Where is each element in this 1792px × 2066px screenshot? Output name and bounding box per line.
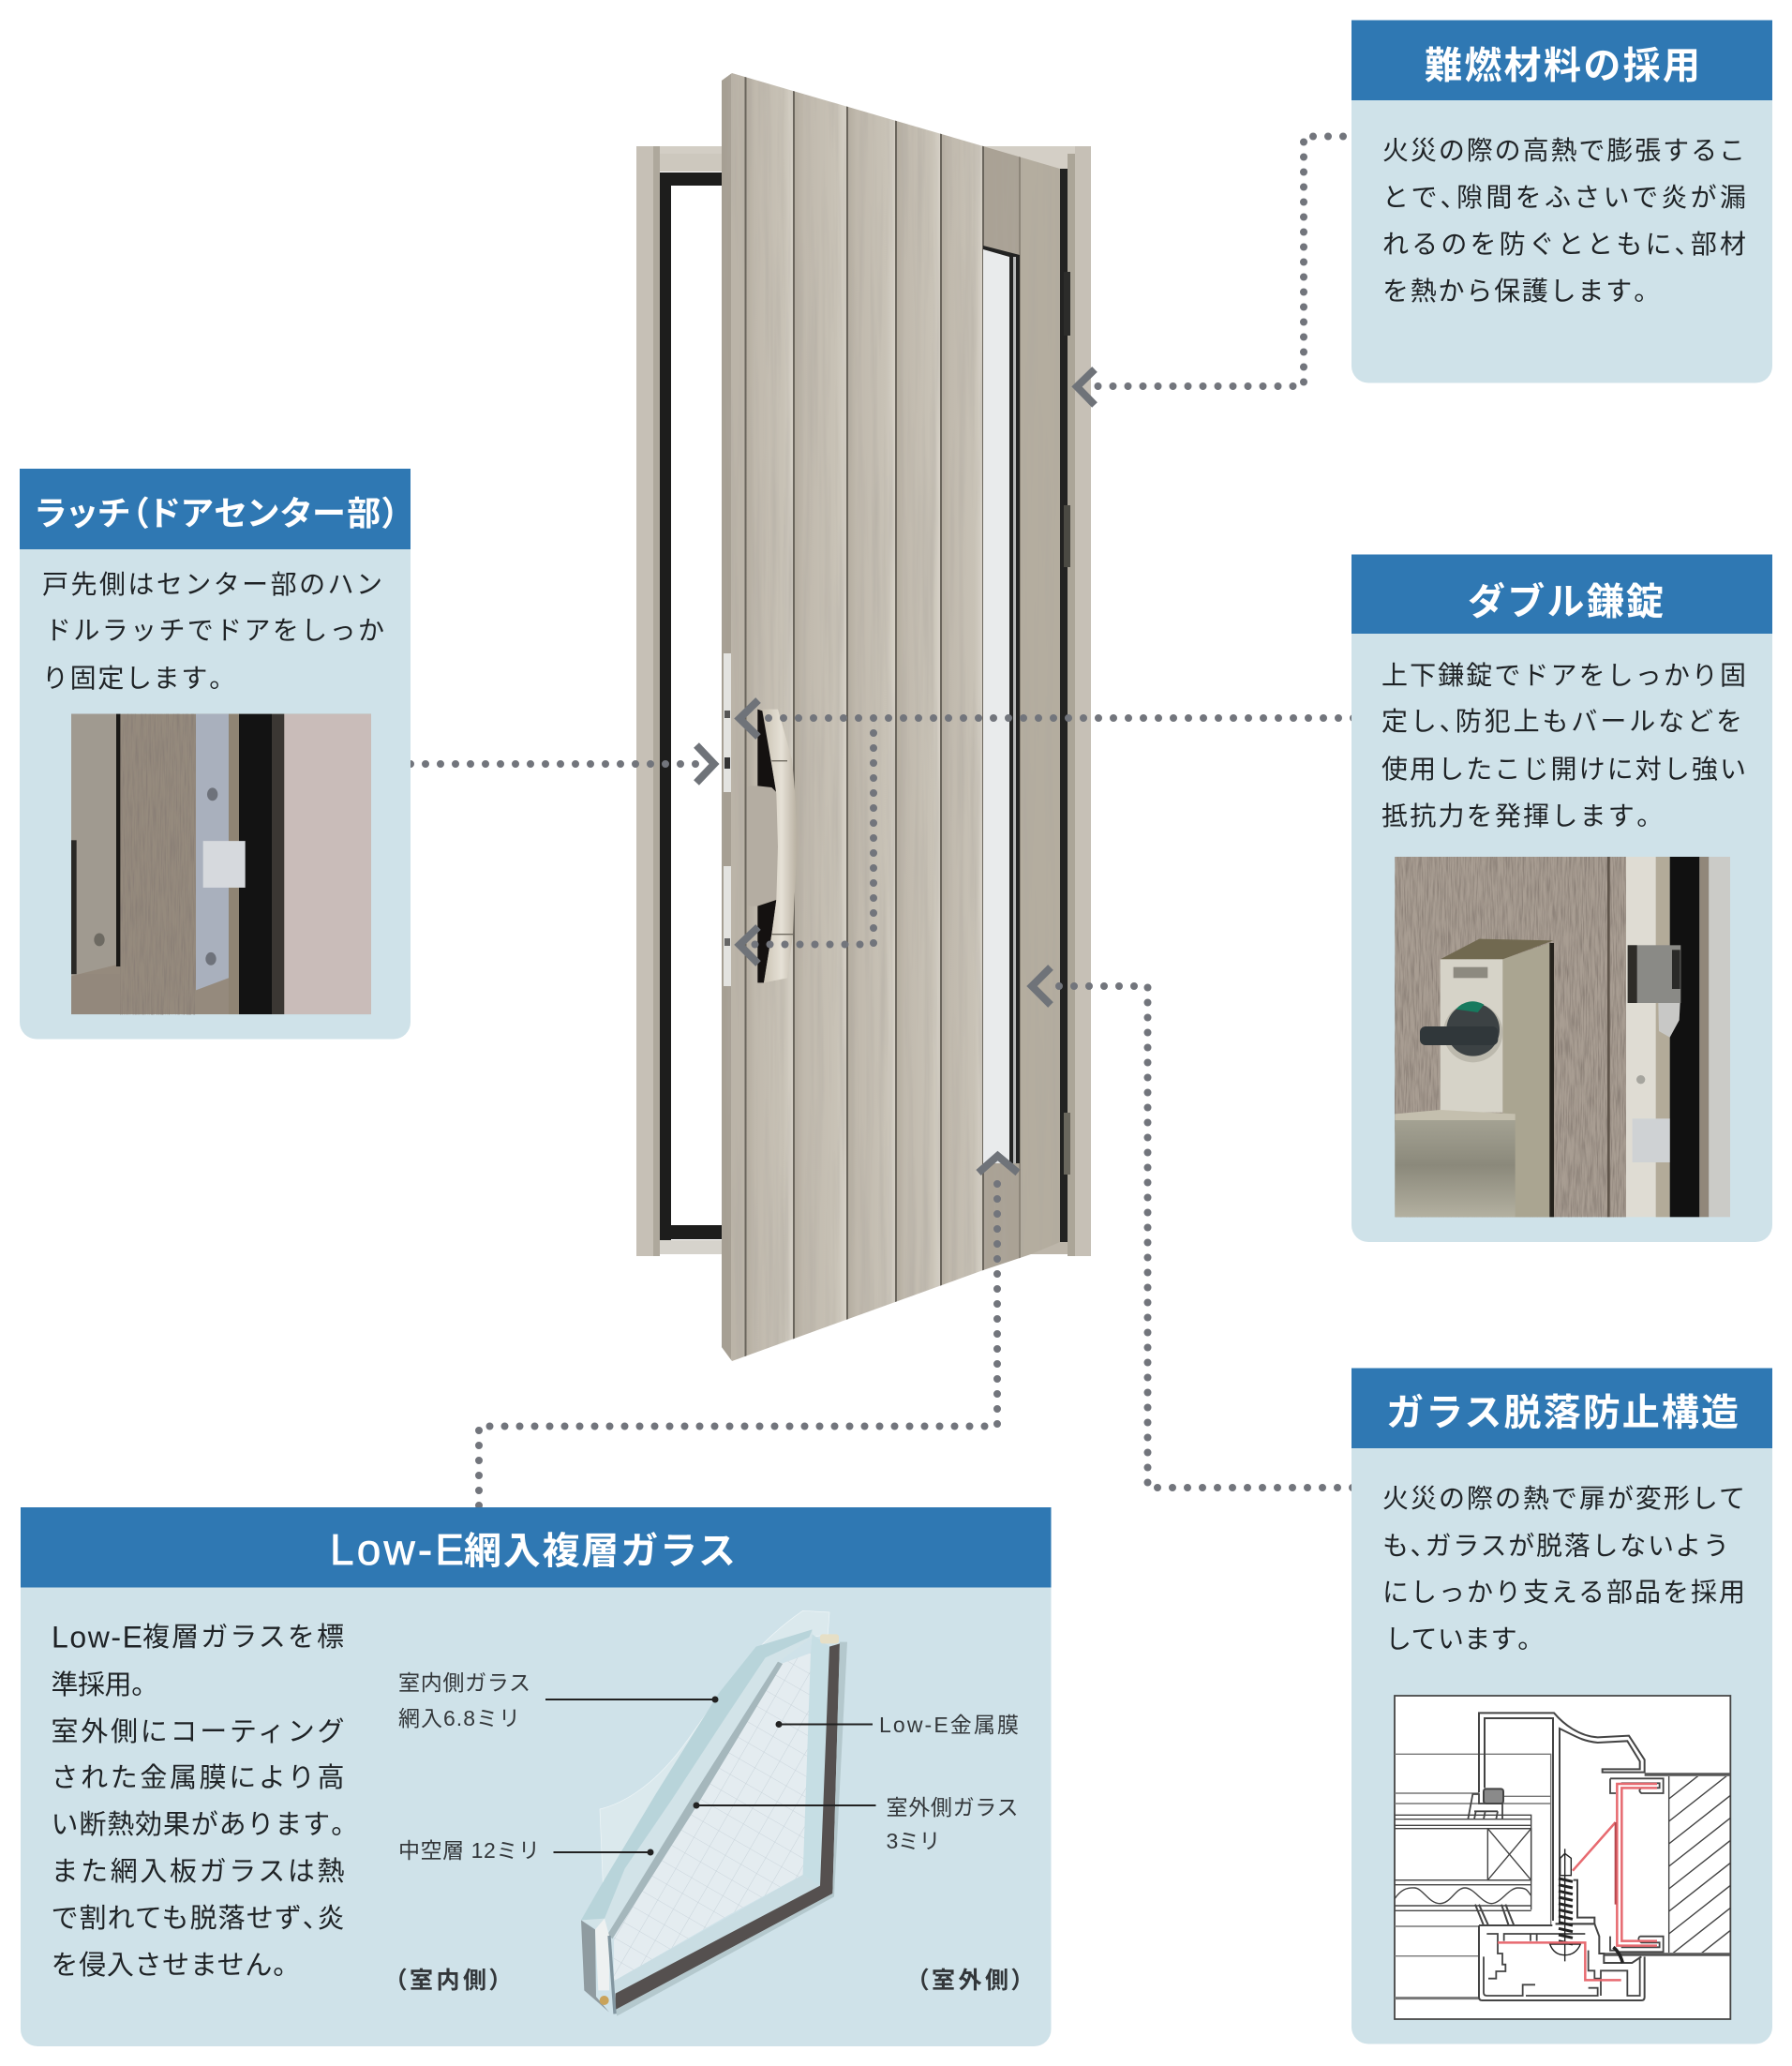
labels: 3ミリ <box>887 1829 941 1853</box>
text block: にしっかり支える部品を採用 <box>1382 1578 1745 1607</box>
arrow <box>1032 967 1051 1005</box>
leader: Low-E glass <box>479 1156 1018 1505</box>
panel: Low-E wired double glazing <box>21 1507 1052 2046</box>
text block: 火災の際の熱で扉が変形して <box>1382 1484 1745 1513</box>
side glass slit <box>983 246 1020 1163</box>
text block: 上下鎌錠でドアをしっかり固 <box>1381 661 1746 690</box>
heading: ガラス脱落防止構造 <box>1386 1393 1739 1434</box>
arrow <box>978 1156 1018 1173</box>
photo: double lock close-up <box>1395 857 1730 1217</box>
text block: り固定します。 <box>42 664 222 693</box>
text block: で割れても脱落せず、炎 <box>51 1903 345 1934</box>
labels: （室内側） <box>395 1968 501 1994</box>
labels: Low-E金属膜 <box>879 1713 1019 1737</box>
hinges <box>1064 272 1070 1175</box>
door handle <box>747 710 798 982</box>
heading: Low-E <box>330 1525 464 1574</box>
arrow <box>1077 369 1095 405</box>
leader lines <box>545 1697 875 1856</box>
text block: 火災の際の高熱で膨張するこ <box>1382 136 1745 165</box>
panel: glass retention structure <box>1351 1369 1772 2044</box>
cross-section diagram <box>1395 1696 1730 2019</box>
text block: 使用したこじ開けに対し強い <box>1381 755 1746 784</box>
text block <box>1381 661 1746 831</box>
glass illustration <box>581 1610 847 2016</box>
text block: 準採用。 <box>51 1669 144 1700</box>
text block: も、ガラスが脱落しないよう <box>1382 1532 1729 1560</box>
door leaf with vertical planks <box>722 66 1060 1369</box>
heading: 難燃材料の採用 <box>1425 45 1700 86</box>
leader: double lock <box>739 700 1353 964</box>
text block <box>1382 1484 1745 1654</box>
heading <box>21 1507 1052 1588</box>
leader: fire-resistant material <box>1077 137 1343 405</box>
panel: fire-resistant material <box>1351 21 1772 382</box>
photo: latch close-up <box>71 714 371 1014</box>
leader: latch <box>411 745 714 783</box>
text block: また網入板ガラスは熱 <box>51 1856 345 1887</box>
text block: 抵抗力を発揮します。 <box>1381 801 1650 831</box>
heading <box>20 469 411 549</box>
text block <box>1382 136 1746 306</box>
heading <box>1351 1369 1772 1448</box>
heading: 網入複層ガラス <box>464 1531 736 1572</box>
text block: 定し、防犯上もバールなどを <box>1381 707 1742 736</box>
door illustration <box>636 66 1091 1369</box>
arrow bottom <box>739 927 758 964</box>
panel: double lock <box>1351 555 1772 1242</box>
text block <box>42 570 384 693</box>
heading: ダブル鎌錠 <box>1468 581 1664 622</box>
text block: 戸先側はセンター部のハン <box>42 570 382 599</box>
text block: Low-E <box>52 1620 142 1654</box>
labels: 室外側ガラス <box>887 1795 1018 1819</box>
text block: しています。 <box>1385 1624 1531 1654</box>
text block: 室外側にコーティング <box>51 1716 345 1747</box>
latch plates on door edge <box>724 653 731 986</box>
text block <box>51 1620 345 1981</box>
text block: とで、隙間をふさいで炎が漏 <box>1382 183 1746 212</box>
labels: （室外側） <box>917 1968 1023 1994</box>
leader: glass retention <box>1032 967 1352 1488</box>
labels: 中空層 12ミリ <box>398 1838 540 1863</box>
text block: 複層ガラスを標 <box>142 1622 344 1653</box>
text block: い断熱効果があります。 <box>51 1809 345 1840</box>
heading: ラッチ（ドアセンター部） <box>36 494 399 532</box>
arrow top <box>739 700 758 737</box>
labels: 室内側ガラス <box>398 1670 530 1695</box>
text block: された金属膜により高 <box>51 1762 345 1793</box>
heading <box>1351 21 1772 100</box>
heading <box>1351 555 1772 634</box>
text block: れるのを防ぐとともに、部材 <box>1382 230 1746 259</box>
text block: を侵入させません。 <box>51 1950 287 1981</box>
arrow <box>696 745 714 783</box>
door frame <box>636 146 1091 1256</box>
panel: latch <box>20 469 411 1039</box>
labels <box>395 1670 1023 1994</box>
labels: 網入6.8ミリ <box>398 1706 520 1730</box>
text block: ドルラッチでドアをしっか <box>45 616 384 645</box>
text block: を熱から保護します。 <box>1382 277 1647 306</box>
